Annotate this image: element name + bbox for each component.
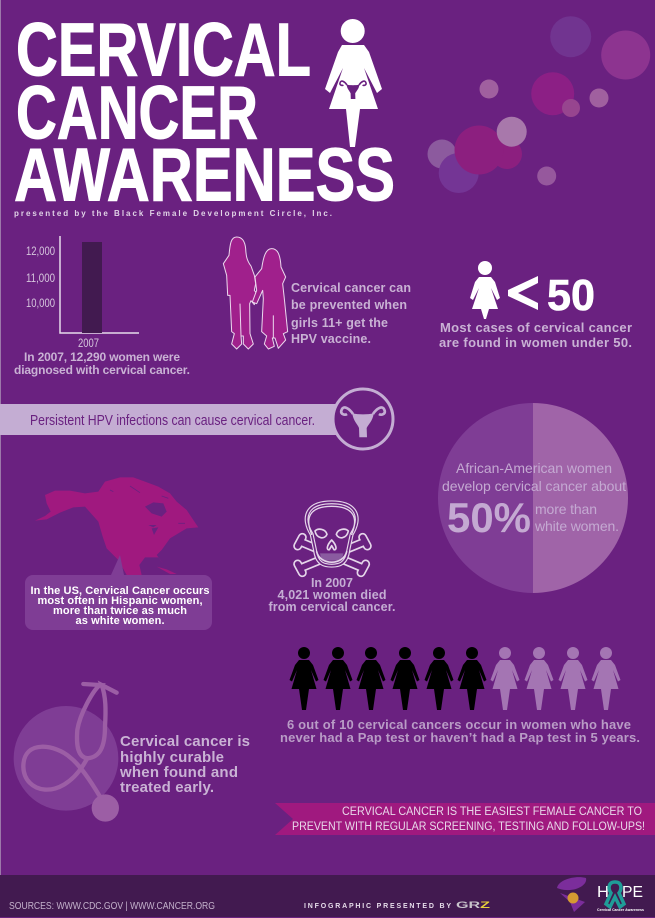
under 50 text: Most cases of cervical cancer [440, 320, 632, 335]
decorative bubbles [428, 16, 650, 193]
chart caption: diagnosed with cervical cancer. [14, 363, 190, 377]
banner: persistent HPV: Persistent HPV infections can cause cervical cancer. [30, 412, 315, 429]
bar chart: 2007 [78, 336, 99, 350]
pictogram: 6 of 10 women [290, 647, 620, 710]
under 50 text: are found in women under 50. [439, 335, 632, 350]
vaccine text: be prevented when [291, 298, 407, 312]
icon: uterus in circle [333, 389, 393, 449]
deaths text [268, 576, 396, 614]
callout: Hispanic women: most often in Hispanic women, [38, 595, 202, 607]
map: North America [35, 477, 198, 575]
under 50 text [439, 320, 632, 350]
bar chart: 12,000 [26, 244, 55, 258]
title: CANCER [16, 70, 258, 154]
HOPE logo: H [597, 884, 609, 901]
title: CERVICAL [16, 8, 311, 92]
stat: less than 50: 50 [547, 271, 595, 320]
pie chart: African-American women: develop cervical cancer about [442, 478, 626, 494]
vaccine text [291, 281, 411, 346]
pie chart: African-American women [438, 403, 628, 593]
banner: easiest to prevent [275, 803, 655, 835]
curable text: when found and [119, 764, 238, 781]
callout: Hispanic women: more than twice as much [53, 605, 187, 617]
callout: Hispanic women: In the US, Cervical Cancer occurs [30, 585, 210, 597]
Pap test text: never had a Pap test or haven’t had a Pap test in 5 years. [280, 730, 640, 745]
vaccine text: Cervical cancer can [291, 281, 411, 295]
icon: woman with uterus [325, 19, 382, 147]
presented by: INFOGRAPHIC PRESENTED BY [304, 903, 451, 910]
icon: two girls holding hands [223, 237, 288, 349]
curable text: highly curable [120, 749, 224, 766]
stat: less than 50 [508, 271, 595, 320]
chart caption: In 2007, 12,290 women were [24, 350, 180, 364]
HOPE logo: PE [622, 884, 643, 901]
Pap test text: 6 out of 10 cervical cancers occur in women who have [287, 717, 631, 732]
curable text: treated early. [120, 779, 214, 796]
icon: stethoscope [14, 684, 119, 822]
deaths text: from cervical cancer. [268, 600, 396, 614]
HOPE logo [597, 882, 644, 912]
HOPE logo: Cervical Cancer Awareness [597, 908, 644, 912]
icon: skull and crossbones [298, 502, 367, 573]
chart caption [14, 350, 190, 377]
hat and duck logo [557, 877, 586, 912]
footer bar [0, 875, 655, 918]
deaths text: 4,021 women died [278, 588, 386, 602]
title [14, 8, 395, 216]
bar chart: 10,000 [26, 296, 55, 310]
vaccine text: girls 11+ get the [291, 316, 388, 330]
sources: SOURCES: WWW.CDC.GOV | WWW.CANCER.ORG [9, 901, 215, 912]
pie chart: African-American women: African-American women [456, 460, 612, 476]
pie chart: African-American women: white women. [534, 518, 619, 534]
pie chart: African-American women: more than [535, 501, 597, 517]
subtitle: presented by the Black Female Development Circle, Inc. [14, 209, 332, 218]
Pap test text [280, 717, 640, 745]
bar chart [26, 236, 139, 350]
pie chart: African-American women: 50% [447, 494, 531, 541]
curable text [119, 733, 250, 796]
GRZ logo: GR Z [456, 900, 491, 910]
banner: persistent HPV [0, 404, 340, 435]
icon: woman under 50 [470, 261, 500, 319]
curable text: Cervical cancer is [120, 733, 250, 750]
callout: Hispanic women: as white women. [76, 615, 164, 627]
callout: Hispanic women [25, 555, 212, 630]
title: AWARENESS [14, 132, 395, 216]
banner: easiest to prevent: CERVICAL CANCER IS THE EASIEST FEMALE CANCER TO [342, 806, 642, 818]
deaths text: In 2007 [311, 576, 353, 590]
bar chart: 11,000 [26, 271, 55, 285]
vaccine text: HPV vaccine. [291, 332, 371, 346]
